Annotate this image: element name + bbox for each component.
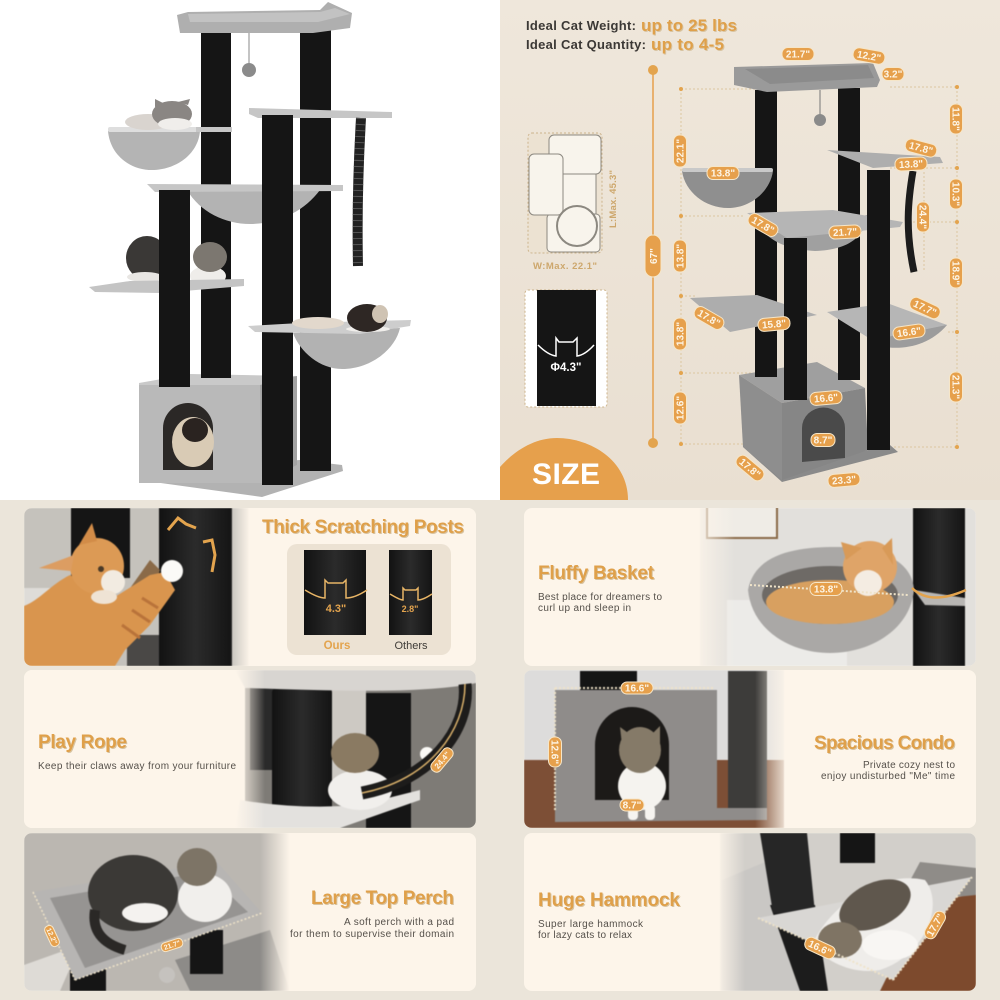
bottom backdrop bbox=[0, 500, 1000, 1000]
heading: cat quantity bbox=[526, 35, 724, 54]
height arrow 67 in: 67" bbox=[649, 248, 660, 264]
arrow: wrap around post bbox=[912, 588, 966, 598]
description: Best place for dreamers to bbox=[538, 592, 662, 603]
SIZE tab bbox=[500, 438, 628, 500]
description: Super large hammock bbox=[538, 919, 644, 930]
pill: perch width bbox=[160, 937, 184, 953]
photo: cat scratching bbox=[24, 508, 249, 666]
24.4 rope bbox=[916, 202, 930, 232]
front left post bbox=[159, 190, 190, 387]
12.2 top bbox=[852, 47, 886, 65]
17.8 perch bbox=[904, 138, 938, 158]
panel: thick scratching posts bbox=[24, 508, 476, 666]
description: for lazy cats to relax bbox=[538, 930, 632, 941]
17.8 platform: 17.8" bbox=[695, 308, 722, 330]
heading: Play Rope bbox=[38, 732, 127, 753]
SIZE tab: SIZE bbox=[532, 458, 600, 491]
middle hammock bbox=[147, 184, 343, 224]
comparison card bbox=[287, 544, 451, 655]
heading: Thick Scratching Posts bbox=[262, 517, 464, 538]
fade bbox=[756, 670, 785, 828]
photo: cat in hammock bbox=[720, 833, 976, 991]
17.7 lower hammock bbox=[908, 295, 942, 321]
height arrow 67 in bbox=[645, 65, 661, 448]
photo: cat on perch bbox=[24, 833, 294, 991]
pill: hammock depth bbox=[922, 909, 948, 941]
23.3 base: 23.3" bbox=[832, 474, 857, 488]
dimension guides bbox=[679, 85, 959, 449]
3.2: 3.2" bbox=[884, 70, 903, 80]
heading: cat weight: Ideal Cat Weight: bbox=[526, 18, 636, 33]
21.7 top: 21.7" bbox=[786, 50, 810, 60]
pill: rope length: 24.4" bbox=[433, 750, 452, 771]
description: for them to supervise their domain bbox=[290, 929, 454, 940]
22.1 height bbox=[674, 135, 686, 167]
description: enjoy undisturbed "Me" time bbox=[821, 771, 955, 782]
description: curl up and sleep in bbox=[538, 603, 631, 614]
front right post bbox=[262, 115, 293, 485]
10.3 right bbox=[950, 179, 962, 209]
tree diagram bbox=[682, 63, 947, 482]
lower hammock bbox=[827, 303, 947, 348]
panel: product photo bbox=[0, 0, 500, 500]
pill: door width bbox=[620, 799, 644, 812]
pill: condo height bbox=[548, 737, 562, 767]
left platform bbox=[89, 279, 244, 293]
post diameter card bbox=[525, 290, 607, 407]
16.6 condo: 16.6" bbox=[814, 392, 839, 406]
12.2 top: 12.2" bbox=[856, 49, 882, 65]
lower hammock bbox=[248, 304, 411, 369]
description: Keep their claws away from your furniture bbox=[38, 761, 236, 772]
11.8 right bbox=[950, 104, 962, 134]
description bbox=[538, 592, 662, 614]
condo bbox=[739, 362, 898, 482]
description bbox=[290, 917, 454, 940]
icon: scratch marks bbox=[168, 518, 215, 572]
17.8 hammock: 17.8" bbox=[749, 215, 776, 237]
description bbox=[821, 760, 955, 782]
17.8 hammock bbox=[746, 211, 780, 239]
heading: cat weight bbox=[526, 16, 737, 35]
value 2.8: 2.8" bbox=[402, 604, 418, 614]
pill: hammock width bbox=[803, 935, 837, 961]
13.8 perch: 13.8" bbox=[899, 159, 924, 171]
16.6 condo bbox=[809, 390, 843, 406]
18.9 right bbox=[950, 258, 962, 288]
13.8 basket bbox=[707, 166, 739, 180]
pill: basket diameter bbox=[810, 582, 842, 596]
heading: cat quantity: up to 4-5 bbox=[651, 35, 724, 54]
21.7 top bbox=[782, 48, 814, 60]
diameter value: Φ4.3" bbox=[551, 362, 581, 374]
dimension labels bbox=[674, 47, 962, 488]
icon: others cat outline bbox=[390, 588, 432, 600]
8.7 door bbox=[811, 434, 835, 446]
cat footprint diagram bbox=[528, 133, 602, 253]
pill: rope length bbox=[430, 747, 454, 773]
8.7 door: 8.7" bbox=[814, 436, 833, 446]
21.3 right: 21.3" bbox=[950, 375, 960, 399]
15.8 platform bbox=[757, 316, 791, 332]
pill: condo width: 16.6" bbox=[625, 684, 649, 694]
heading: Large Top Perch bbox=[311, 888, 454, 909]
toy ball bbox=[242, 33, 256, 77]
panel: play rope bbox=[24, 670, 476, 828]
fade bbox=[260, 833, 290, 991]
13.8 height bbox=[674, 240, 686, 272]
heading: cat weight: up to 25 lbs bbox=[641, 16, 737, 35]
back posts bbox=[755, 88, 860, 380]
13.8 basket: 13.8" bbox=[711, 168, 735, 180]
pill: hammock width: 16.6" bbox=[806, 939, 833, 959]
width label: W:Max. 22.1" bbox=[533, 261, 597, 272]
rope bbox=[908, 171, 914, 272]
icon: cat outline bbox=[538, 338, 594, 356]
21.3 right bbox=[950, 372, 962, 402]
21.7 hammock bbox=[829, 225, 861, 239]
base and condo bbox=[139, 374, 343, 497]
photo: cat in basket bbox=[700, 500, 976, 666]
17.8 base bbox=[734, 453, 766, 483]
top perch bbox=[177, 2, 352, 33]
15.8 platform: 15.8" bbox=[762, 318, 787, 332]
17.8 platform bbox=[692, 304, 726, 332]
fade bbox=[700, 508, 732, 666]
description: A soft perch with a pad bbox=[344, 917, 454, 928]
panel: fluffy basket bbox=[524, 500, 976, 666]
icon: ours cat outline bbox=[305, 580, 367, 598]
17.8 base: 17.8" bbox=[737, 457, 762, 481]
rope bbox=[358, 118, 361, 266]
pill: basket diameter: 13.8" bbox=[814, 584, 838, 596]
left platform bbox=[690, 295, 817, 332]
basket bbox=[682, 168, 773, 208]
16.6 lower hammock bbox=[892, 323, 926, 341]
12.6 height: 12.6" bbox=[676, 396, 686, 420]
21.7 hammock: 21.7" bbox=[833, 227, 858, 239]
17.7 lower hammock: 17.7" bbox=[911, 299, 938, 319]
13.8 height: 13.8" bbox=[676, 244, 686, 268]
pill: condo width bbox=[621, 682, 653, 694]
cat on platform bbox=[126, 236, 227, 286]
11.8 right: 11.8" bbox=[950, 107, 960, 131]
13.8 height lower: 13.8" bbox=[676, 322, 686, 346]
pill: door width: 8.7" bbox=[623, 800, 642, 812]
pill: perch depth bbox=[44, 925, 60, 948]
13.8 height lower bbox=[674, 318, 686, 350]
toy ball bbox=[814, 90, 826, 126]
fade bbox=[715, 833, 745, 991]
length label: L:Max. 45.3" bbox=[608, 170, 619, 228]
17.8 perch: 17.8" bbox=[908, 141, 934, 157]
front posts bbox=[784, 170, 890, 450]
panel: large top perch bbox=[24, 833, 476, 991]
back posts bbox=[201, 29, 331, 471]
top perch bbox=[734, 63, 880, 92]
10.3 right: 10.3" bbox=[950, 182, 960, 206]
pill: perch width: 21.7" bbox=[163, 940, 181, 952]
22.1 height: 22.1" bbox=[676, 139, 686, 163]
heading: Spacious Condo bbox=[814, 733, 955, 754]
16.6 lower hammock: 16.6" bbox=[896, 326, 922, 340]
value 4.3: 4.3" bbox=[326, 603, 346, 615]
24.4 rope: 24.4" bbox=[916, 205, 928, 229]
heading: cat quantity: Ideal Cat Quantity: bbox=[526, 37, 646, 52]
panel: spacious condo bbox=[524, 670, 976, 828]
fade bbox=[235, 670, 265, 828]
description bbox=[538, 919, 644, 941]
photo: cat with rope bbox=[235, 670, 476, 828]
pill: hammock depth: 17.7" bbox=[925, 912, 947, 939]
23.3 base bbox=[827, 472, 861, 488]
pill: condo height: 12.6" bbox=[548, 740, 560, 764]
pill: perch depth: 12.2" bbox=[44, 927, 58, 946]
upper right perch bbox=[249, 108, 392, 118]
basket bbox=[108, 99, 232, 170]
hammock bbox=[747, 210, 903, 251]
12.6 height bbox=[674, 392, 686, 424]
upper perch bbox=[827, 150, 943, 168]
heading: Fluffy Basket bbox=[538, 563, 655, 584]
fade bbox=[230, 508, 250, 666]
panel: size diagram bbox=[500, 0, 1000, 500]
description: Private cozy nest to bbox=[863, 760, 955, 771]
dotted measure bbox=[750, 585, 908, 595]
photo: cat in condo bbox=[524, 670, 784, 828]
panel: huge hammock bbox=[524, 833, 976, 991]
label ours: Ours bbox=[324, 640, 350, 652]
heading: Huge Hammock bbox=[538, 890, 680, 911]
18.9 right: 18.9" bbox=[950, 261, 960, 285]
label others: Others bbox=[394, 640, 428, 652]
13.8 perch bbox=[895, 157, 927, 171]
